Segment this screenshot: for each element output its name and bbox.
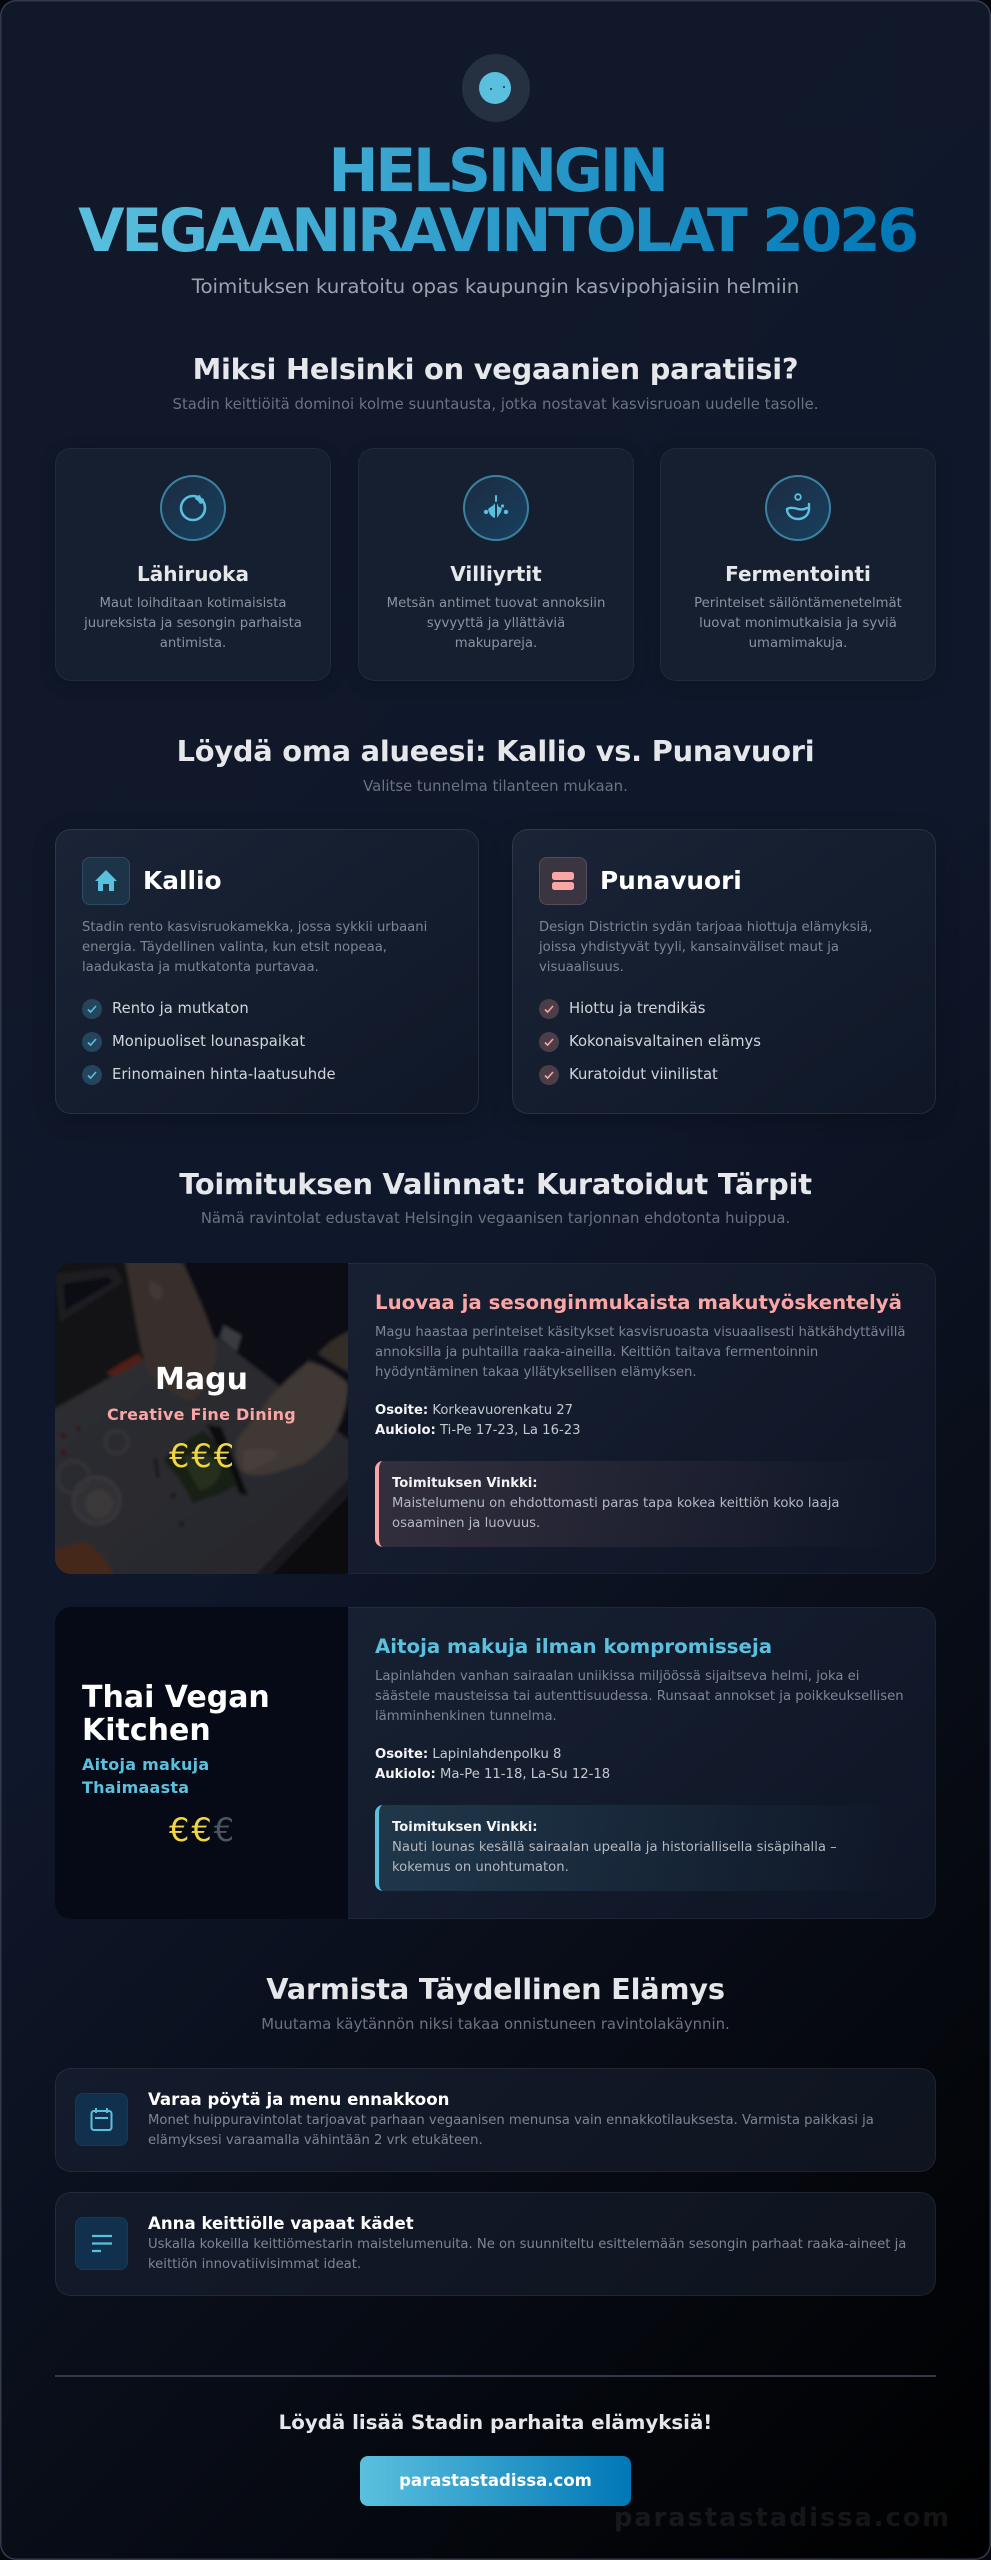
photo: hands chopping herbs xyxy=(55,1263,348,1574)
address and hours: Aukiolo: Ma-Pe 11-18, La-Su 12-18 xyxy=(375,1767,610,1782)
district name: Kallio xyxy=(143,866,221,895)
description xyxy=(375,1669,904,1724)
callout: editor's tip: Toimituksen Vinkki: xyxy=(392,1820,538,1835)
description: Lapinlahden vanhan sairaalan uniikissa miljöössä sijaitseva helmi, joka ei xyxy=(375,1669,859,1684)
district text: energia. Täydellinen valinta, kun etsit nopeaa, xyxy=(82,940,387,955)
tip title: Anna keittiölle vapaat kädet xyxy=(148,2214,414,2233)
callout: editor's tip: kokemus on unohtumaton. xyxy=(392,1860,569,1875)
restaurant details xyxy=(375,1635,904,1891)
details heading: Luovaa ja sesonginmukaista makutyöskentelyä xyxy=(375,1291,902,1314)
feature item xyxy=(539,999,706,1019)
card text: juureksista ja sesongin parhaista xyxy=(84,616,302,631)
description: Magu haastaa perinteiset käsitykset kasvisruoasta visuaalisesti hätkähdyttävillä xyxy=(375,1325,905,1340)
feature item xyxy=(82,999,249,1019)
callout: editor's tip: osaaminen ja luovuus. xyxy=(392,1516,540,1531)
card title: Fermentointi xyxy=(725,562,871,586)
district name: Punavuori xyxy=(600,866,742,895)
title xyxy=(76,141,918,261)
details heading: Aitoja makuja ilman kompromisseja xyxy=(375,1635,772,1658)
heading: why Helsinki: Miksi Helsinki on vegaanien paratiisi? xyxy=(193,352,798,386)
tip text: elämyksesi varaamalla vähintään 2 vrk etukäteen. xyxy=(148,2133,483,2148)
panel: tip book a table xyxy=(55,2068,936,2172)
watermark: parastastadissa.com xyxy=(614,2503,951,2533)
tip text xyxy=(148,2113,874,2148)
address and hours xyxy=(375,1403,581,1438)
card text: syvyyttä ja yllättäviä xyxy=(427,616,565,631)
card text: antimista. xyxy=(160,636,226,651)
restaurant style: Aitoja makuja xyxy=(82,1755,209,1774)
section subtitle: perfect experience: Muutama käytännön niksi takaa onnistuneen ravintolakäynnin. xyxy=(261,2015,730,2033)
footer call to action text: Löydä lisää Stadin parhaita elämyksiä! xyxy=(279,2411,712,2434)
district text xyxy=(538,920,872,975)
panel: Fermentointi xyxy=(660,448,936,681)
button: website link xyxy=(360,2456,631,2506)
feature item: Monipuoliset lounaspaikat xyxy=(112,1033,305,1050)
card title: Villiyrtit xyxy=(450,562,542,586)
district text: joissa yhdistyvät tyyli, kansainväliset maut ja xyxy=(539,940,839,955)
restaurant name xyxy=(82,1680,270,1748)
card text: Perinteiset säilöntämenetelmät xyxy=(694,596,902,611)
address and hours: Aukiolo: Ti-Pe 17-23, La 16-23 xyxy=(375,1423,581,1438)
panel: Villiyrtit xyxy=(358,448,634,681)
icon: local food xyxy=(160,475,226,541)
icon: header logo xyxy=(462,54,530,122)
card text xyxy=(84,596,302,651)
tip text xyxy=(148,2237,906,2272)
icon: lines xyxy=(75,2217,128,2270)
district text xyxy=(82,920,427,975)
card text: Maut loihditaan kotimaisista xyxy=(99,596,287,611)
card text: luovat monimutkaisia ja syviä xyxy=(699,616,897,631)
feature item: Kokonaisvaltainen elämys xyxy=(569,1033,761,1050)
callout: editor's tip: Toimituksen Vinkki: xyxy=(392,1476,538,1491)
tip text: keittiön innovatiivisimmat ideat. xyxy=(148,2257,361,2272)
panel: Punavuori xyxy=(512,829,936,1114)
panel: restaurant Thai Vegan Kitchen xyxy=(55,1607,936,1919)
callout: editor's tip xyxy=(375,1805,905,1891)
card text: Metsän antimet tuovat annoksiin xyxy=(387,596,605,611)
restaurant style: Creative Fine Dining xyxy=(107,1405,296,1424)
price rating: €€€ xyxy=(169,1437,236,1475)
tip text: Uskalla kokeilla keittiömestarin maistelumenuita. Ne on suunniteltu esittelemään sesongin parhaat raaka-aineet ja xyxy=(148,2237,906,2252)
restaurant name: Magu xyxy=(155,1362,248,1397)
panel: tip trust the kitchen xyxy=(55,2192,936,2296)
card title: Lähiruoka xyxy=(137,562,249,586)
feature item: Hiottu ja trendikäs xyxy=(569,1000,706,1017)
title: VEGAANIRAVINTOLAT 2026 xyxy=(78,196,916,266)
restaurant style xyxy=(82,1755,209,1797)
restaurant name: Thai Vegan xyxy=(82,1680,270,1715)
icon: wild herbs xyxy=(463,475,529,541)
card text: umamimakuja. xyxy=(749,636,847,651)
icon: fermentation xyxy=(765,475,831,541)
button: website link: parastastadissa.com xyxy=(399,2471,592,2490)
address and hours: Osoite: Lapinlahdenpolku 8 xyxy=(375,1747,561,1762)
district text: visuaalisuus. xyxy=(539,960,624,975)
heading: editors' picks: Toimituksen Valinnat: Kuratoidut Tärpit xyxy=(179,1167,812,1201)
description: lämminhenkinen tunnelma. xyxy=(375,1709,557,1724)
district text: Design Districtin sydän tarjoaa hiottuja elämyksiä, xyxy=(539,920,872,935)
tip title: Varaa pöytä ja menu ennakkoon xyxy=(148,2090,449,2109)
description: hyödyntäminen takaa yllätyksellisen elämyksen. xyxy=(375,1365,697,1380)
title: HELSINGIN xyxy=(328,136,666,206)
panel: Lähiruoka xyxy=(55,448,331,681)
feature item: Kuratoidut viinilistat xyxy=(569,1066,718,1083)
callout: editor's tip: Maistelumenu on ehdottomasti paras tapa kokea keittiön koko laaja xyxy=(392,1496,839,1511)
district text: laadukasta ja mutkatonta purtavaa. xyxy=(82,960,319,975)
icon: house xyxy=(82,857,130,905)
card text xyxy=(387,596,605,651)
restaurant name panel xyxy=(55,1607,348,1919)
description: säästele mausteissa tai autenttisuudessa. Runsaat annokset ja poikkeuksellisen xyxy=(375,1689,904,1704)
panel: restaurant Magu xyxy=(55,1263,936,1574)
callout: editor's tip xyxy=(375,1461,905,1547)
section subtitle: why Helsinki: Stadin keittiöitä dominoi kolme suuntausta, jotka nostavat kasvisruoan uudelle tasolle. xyxy=(173,395,818,413)
description: annoksilla ja puhtailla raaka-aineilla. Keittiön taitava fermentoinnin xyxy=(375,1345,818,1360)
panel: Kallio xyxy=(55,829,479,1114)
restaurant details xyxy=(375,1291,905,1547)
restaurant style: Thaimaasta xyxy=(82,1778,189,1797)
address and hours xyxy=(375,1747,610,1782)
callout: editor's tip: Nauti lounas kesällä sairaalan upealla ja historiallisella sisäpihalla – xyxy=(392,1840,837,1855)
feature item: Rento ja mutkaton xyxy=(112,1000,249,1017)
subtitle: Toimituksen kuratoitu opas kaupungin kasvipohjaisiin helmiin xyxy=(192,275,799,298)
icon: calendar xyxy=(75,2093,128,2146)
card text: makupareja. xyxy=(455,636,537,651)
description xyxy=(375,1325,905,1380)
district text: Stadin rento kasvisruokamekka, jossa sykkii urbaani xyxy=(82,920,427,935)
restaurant photo panel xyxy=(55,1263,348,1574)
feature item: Erinomainen hinta-laatusuhde xyxy=(112,1066,336,1083)
icon: layers xyxy=(539,857,587,905)
section subtitle: editors' picks: Nämä ravintolat edustavat Helsingin vegaanisen tarjonnan ehdotonta huippua. xyxy=(201,1209,790,1227)
heading: districts: Löydä oma alueesi: Kallio vs. Punavuori xyxy=(177,734,814,768)
restaurant name: Kitchen xyxy=(82,1713,211,1748)
address and hours: Osoite: Korkeavuorenkatu 27 xyxy=(375,1403,573,1418)
tip text: Monet huippuravintolat tarjoavat parhaan vegaanisen menunsa vain ennakkotilauksesta. Varmista paikkasi ja xyxy=(148,2113,874,2128)
heading: perfect experience: Varmista Täydellinen Elämys xyxy=(266,1972,725,2006)
price rating: €€€ xyxy=(169,1811,236,1849)
section subtitle: districts: Valitse tunnelma tilanteen mukaan. xyxy=(363,777,628,795)
card text xyxy=(694,596,902,651)
